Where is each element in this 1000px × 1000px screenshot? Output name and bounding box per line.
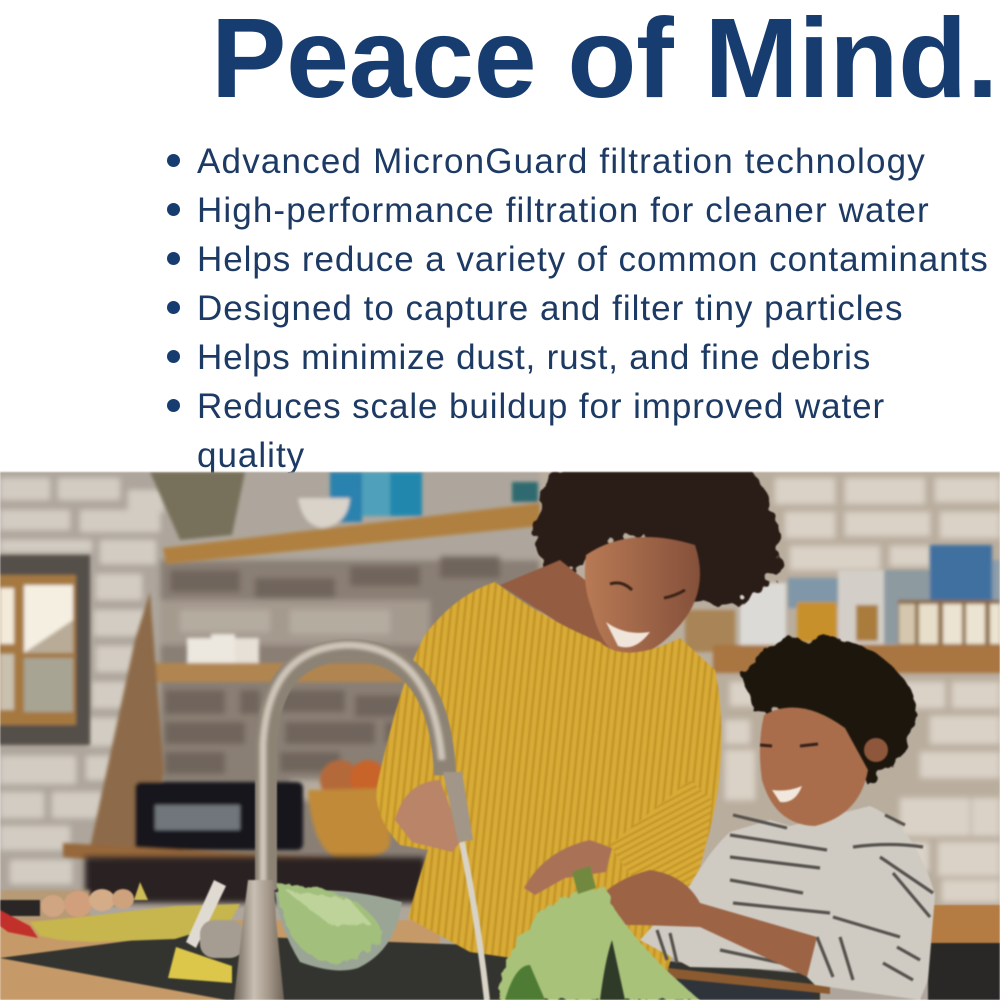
face	[760, 707, 868, 826]
right shelf	[713, 645, 1000, 673]
window	[0, 555, 90, 745]
eyes	[760, 744, 818, 746]
faucet base	[234, 880, 284, 1000]
sponge	[168, 947, 232, 983]
top shelf	[163, 503, 540, 564]
egg tray	[30, 882, 240, 942]
hair	[740, 636, 916, 785]
left hand	[395, 780, 462, 852]
shirt stripes	[657, 815, 933, 980]
chest	[500, 560, 620, 665]
white bowl	[298, 498, 350, 528]
right hand	[524, 840, 612, 895]
smile	[772, 786, 802, 802]
sleeve	[610, 780, 712, 890]
potted plant	[150, 472, 245, 540]
bullet 4: Designed to capture and filter tiny particles	[197, 289, 903, 328]
faucet	[186, 645, 487, 1000]
kitchen photo illustration	[0, 471, 1000, 1000]
bullet 6: Reduces scale buildup for improved water	[197, 387, 885, 426]
face	[585, 537, 700, 657]
wall shelves and objects	[63, 472, 1000, 892]
bullet list	[167, 142, 989, 475]
hanging towel	[90, 592, 164, 848]
bullet 6	[167, 387, 885, 475]
bullet 5: Helps minimize dust, rust, and fine debris	[197, 338, 871, 377]
lettuce	[500, 866, 700, 1000]
hair	[533, 462, 779, 606]
boy	[590, 636, 935, 1000]
arm and hand	[590, 870, 817, 977]
counter and sink	[0, 857, 1000, 1000]
sweater	[376, 582, 721, 980]
white cups	[187, 634, 259, 666]
black appliance	[135, 782, 303, 850]
bullet 2: High-performance filtration for cleaner water	[197, 191, 930, 230]
bullet list: quality	[197, 436, 305, 475]
fruit bowl	[308, 760, 390, 860]
glass bowl with lettuce	[275, 884, 402, 970]
blue bottles	[330, 472, 422, 522]
sprayer	[443, 772, 473, 842]
middle shelf	[146, 663, 412, 682]
woman	[376, 462, 779, 980]
gooseneck	[266, 650, 445, 890]
hose	[462, 842, 487, 1000]
handle	[186, 880, 244, 958]
shirt	[640, 806, 935, 1000]
smile	[606, 622, 650, 647]
lower shelf	[63, 843, 420, 892]
bullet 1: Advanced MicronGuard filtration technology	[197, 142, 926, 181]
background brick wall	[0, 462, 1000, 1000]
facial features	[610, 583, 685, 598]
bullet 3: Helps reduce a variety of common contaminants	[197, 240, 989, 279]
jars	[685, 545, 1000, 652]
